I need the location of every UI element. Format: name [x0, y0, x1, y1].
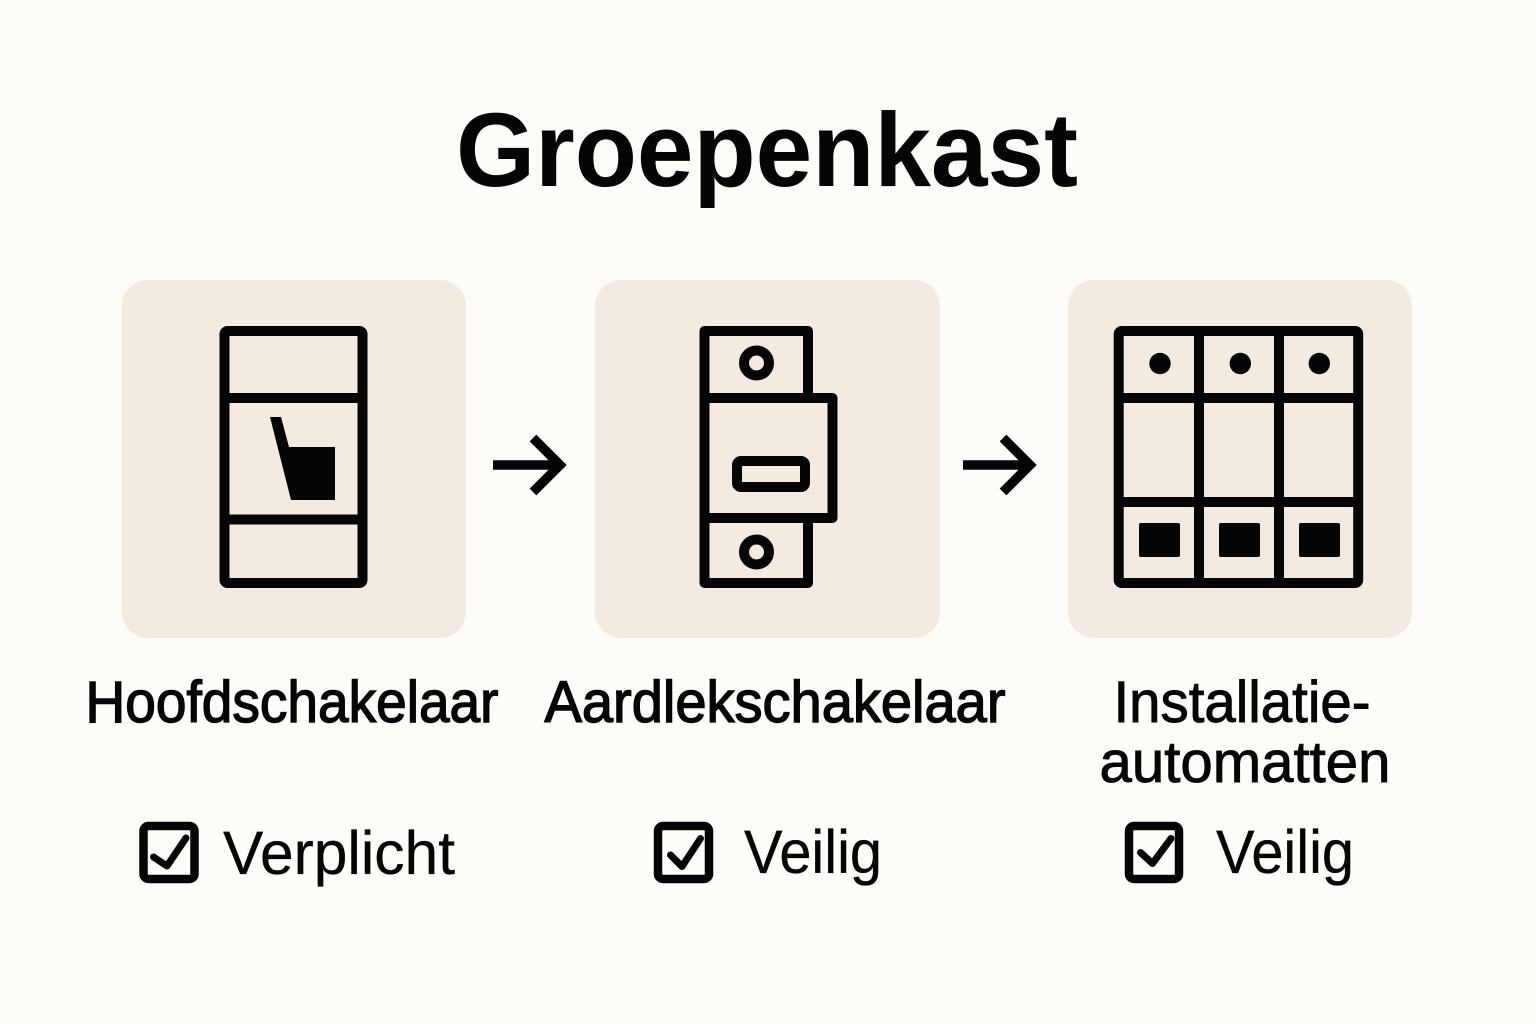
icon: main switch — [224, 331, 362, 583]
label: Installatie-automatten — [1100, 670, 1390, 795]
icon: residual current switch — [704, 331, 832, 583]
label: Installatie-automatten: Installatie- — [1114, 670, 1370, 735]
panel: installatieautomatten — [1068, 280, 1412, 638]
panel: hoofdschakelaar — [122, 280, 466, 638]
status: Veilig 1 — [658, 818, 882, 886]
arrow 1 — [493, 438, 562, 492]
status: Veilig 1: Veilig — [744, 818, 882, 886]
label: Hoofdschakelaar: Hoofdschakelaar — [86, 670, 498, 735]
icon: checkbox — [1129, 826, 1179, 879]
icon: checkbox — [144, 826, 194, 879]
label: Installatie-automatten: automatten — [1100, 730, 1390, 795]
status: Veilig 2: Veilig — [1216, 818, 1354, 886]
title: Groepenkast — [456, 92, 1078, 209]
icon: circuit breakers — [1119, 331, 1358, 583]
arrow 2 — [963, 438, 1032, 492]
status: Veilig 2 — [1129, 818, 1354, 886]
status: Verplicht: Verplicht — [223, 819, 455, 887]
label: Aardlekschakelaar: Aardlekschakelaar — [544, 670, 1006, 735]
panel: aardlekschakelaar — [595, 280, 940, 638]
icon: checkbox — [658, 826, 709, 879]
